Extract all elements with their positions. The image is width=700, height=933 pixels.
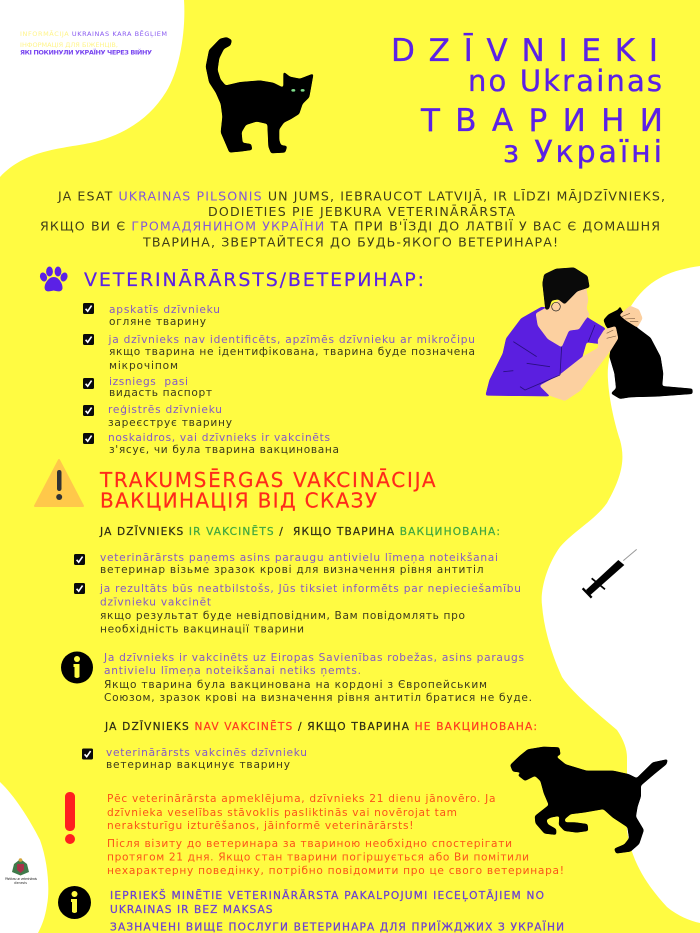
checklist item 1: огляне тварину bbox=[109, 316, 206, 328]
intro text: DODIETIES PIE JEBKURA VETERINĀRĀRSTA bbox=[208, 204, 515, 219]
info text: EU border: Якщо тварина була вакцинована на кордоні з Європейським bbox=[104, 679, 487, 691]
heading: rabies vaccination bbox=[99, 468, 436, 513]
checklist: vaccinated bbox=[74, 552, 521, 636]
checklist: not vaccinated bbox=[82, 747, 307, 771]
warning text: Pēc veterinārārsta apmeklējuma, dzīvnieks 21 dienu jānovēro. Ja bbox=[107, 793, 495, 805]
icon: black dog bbox=[510, 747, 668, 854]
checklist item 5 bbox=[83, 432, 339, 456]
small header text bbox=[20, 29, 167, 56]
intro text: ЯКЩО ВИ Є ГРОМАДЯНИНОМ УКРАЇНИ ТА ПРИ В'ЇЗДІ ДО ЛАТВІЇ У ВАС Є ДОМАШНЯ bbox=[40, 219, 660, 234]
warning text: протягом 21 дня. Якщо стан тварини погіршується або Ви помітили bbox=[107, 852, 529, 864]
checklist: vaccinated: dzīvnieku vakcinēt bbox=[100, 597, 211, 609]
heading: rabies vaccination: TRAKUMSĒRGAS VAKCINĀCIJA bbox=[99, 468, 436, 492]
checklist item 2: ja dzīvnieks nav identificēts, apzīmēs dzīvnieku ar mikročipu bbox=[108, 334, 475, 346]
icon: paw bbox=[39, 266, 69, 291]
small header text: INFORMĀCIJA UKRAINAS KARA BĒGĻIEM bbox=[20, 29, 167, 39]
warning text bbox=[107, 793, 564, 877]
warning text: dzīvnieka veselības stāvoklis pasliktinās vai novērojat tam bbox=[107, 807, 457, 819]
warning text: нехарактерну поведінку, потрібно повідомити про це свого ветеринара! bbox=[107, 865, 564, 877]
checklist item 5: з'ясує, чи була тварина вакцинована bbox=[109, 444, 339, 456]
checklist item 4: зареєструє тварину bbox=[108, 417, 232, 429]
heading: veterinarian: VETERINĀRĀRSTS/ВЕТЕРИНАР: bbox=[84, 267, 424, 291]
checklist: not vaccinated: ветеринар вакцинує тварину bbox=[106, 759, 290, 771]
small header text: ЯКІ ПОКИНУЛИ УКРАЇНУ ЧЕРЕЗ ВІЙНУ bbox=[20, 48, 152, 56]
checklist item 5: noskaidros, vai dzīvnieks ir vakcinēts bbox=[108, 432, 330, 444]
checklist: vaccinated: якщо результат буде невідповідним, Вам повідомлять про bbox=[100, 610, 465, 622]
icon: info 1 bbox=[61, 652, 93, 684]
checklist item 1 bbox=[83, 303, 220, 328]
checklist: not vaccinated: veterinārārsts vakcinēs dzīvnieku bbox=[106, 747, 307, 759]
icon: red exclamation bbox=[65, 792, 75, 844]
warning text: Після візиту до ветеринара за твариною необхідно спостерігати bbox=[107, 838, 512, 850]
checklist item 2: мікрочіпом bbox=[109, 360, 178, 372]
checklist item 3 bbox=[83, 376, 212, 399]
checklist item 3: izsniegs pasi bbox=[109, 376, 188, 388]
logo: coat of arms: Pārtikas un veterinārais bbox=[5, 877, 37, 881]
logo: coat of arms bbox=[5, 858, 37, 885]
checklist: veterinarian bbox=[83, 303, 475, 456]
checklist: vaccinated: необхідність вакцинації тварини bbox=[100, 624, 304, 636]
info text: EU border: Союзом, зразок крові на визначення рівня антитіл братися не буде. bbox=[104, 692, 532, 704]
icon: info 2 bbox=[58, 886, 91, 919]
icon: syringe bbox=[583, 549, 637, 598]
info text: free services: UKRAINAS IR BEZ MAKSAS bbox=[110, 904, 273, 916]
icon: warning triangle bbox=[35, 460, 83, 506]
intro text bbox=[40, 189, 665, 250]
title bbox=[391, 33, 663, 170]
checklist item 3: видасть паспорт bbox=[109, 387, 212, 399]
title: DZĪVNIEKI bbox=[391, 33, 658, 69]
checklist item 2 bbox=[83, 334, 475, 372]
info text: free services: IEPRIEKŠ MINĒTIE VETERINĀRĀRSTA PAKALPOJUMI IECEĻOTĀJIEM NO bbox=[110, 889, 544, 902]
heading: rabies vaccination: ВАКЦИНАЦІЯ ВІД СКАЗУ bbox=[100, 489, 377, 513]
checklist item 1: apskatīs dzīvnieku bbox=[109, 304, 220, 316]
info text: free services bbox=[110, 889, 564, 933]
checklist: vaccinated: ветеринар візьме зразок крові для визначення рівня антитіл bbox=[100, 564, 484, 576]
logo: coat of arms: dienests bbox=[14, 881, 27, 885]
info text: EU border: antivielu līmeņa noteikšanai netiks ņemts. bbox=[104, 665, 361, 677]
checklist item 4 bbox=[83, 404, 232, 429]
checklist: vaccinated: ja rezultāts būs neatbilstošs, Jūs tiksiet informēts par nepieciešamību bbox=[99, 583, 521, 595]
intro text: ТВАРИНА, ЗВЕРТАЙТЕСЯ ДО БУДЬ-ЯКОГО ВЕТЕРИНАРА! bbox=[142, 235, 558, 250]
info text: EU border bbox=[103, 652, 532, 704]
intro text: JA ESAT UKRAINAS PILSONIS UN JUMS, IEBRAUCOT LATVIJĀ, IR LĪDZI MĀJDZĪVNIEKS, bbox=[57, 189, 665, 204]
subheading: vaccinated: JA DZĪVNIEKS IR VAKCINĒTS / ЯКЩО ТВАРИНА ВАКЦИНОВАНА: bbox=[99, 525, 500, 538]
small header text: ІНФОРМАЦІЯ ДЛЯ БІЖЕНЦІВ, bbox=[20, 41, 118, 49]
subheading: not vaccinated: JA DZĪVNIEKS NAV VAKCINĒTS / ЯКЩО ТВАРИНА НЕ ВАКЦИНОВАНА: bbox=[104, 720, 537, 733]
white shape: bottom left bbox=[0, 782, 48, 933]
title: ТВАРИНИ bbox=[420, 103, 663, 139]
info text: EU border: Ja dzīvnieks ir vakcinēts uz Eiropas Savienības robežas, asins paraugs bbox=[103, 652, 524, 664]
checklist item 4: reģistrēs dzīvnieku bbox=[108, 404, 222, 416]
checklist item 2: якщо тварина не ідентифікована, тварина буде позначена bbox=[109, 346, 475, 358]
title: no Ukrainas bbox=[468, 64, 662, 98]
white shape: right side bbox=[542, 266, 700, 923]
title: з Україні bbox=[503, 135, 662, 170]
white shape: top left bbox=[0, 0, 184, 177]
illustration: vet with cat bbox=[485, 267, 693, 401]
warning text: neraksturīgu izturēšanos, jāinformē veterinārārsts! bbox=[107, 820, 414, 832]
icon: black cat bbox=[206, 37, 314, 153]
checklist: vaccinated: veterinārārsts paņems asins paraugu antivielu līmeņa noteikšanai bbox=[100, 552, 498, 564]
